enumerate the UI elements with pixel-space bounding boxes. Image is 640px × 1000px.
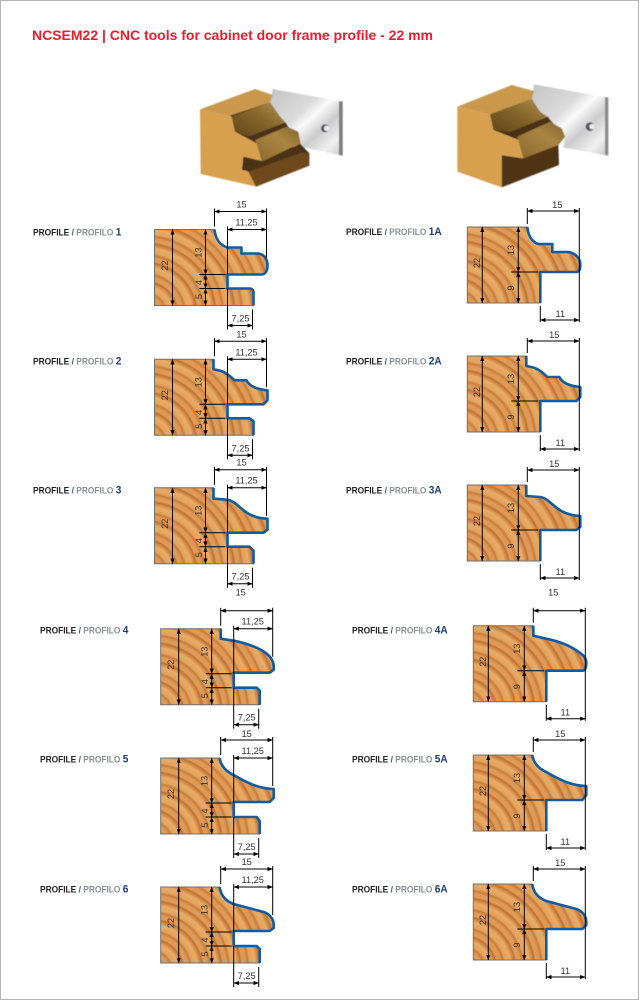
profile 2 diagram: [154, 329, 268, 459]
dimensions: [160, 329, 266, 459]
dimensions: 4: [200, 679, 210, 684]
dimensions: [160, 458, 266, 588]
dimensions: 11: [561, 837, 570, 847]
dimensions: 13: [194, 377, 204, 387]
wood front face: [457, 107, 523, 187]
dimensions: 13: [194, 247, 204, 258]
dimensions: 22: [160, 519, 170, 529]
dimensions: 11,25: [235, 347, 258, 357]
wood section: [154, 230, 268, 306]
dimensions: 9: [506, 414, 516, 420]
dimensions: 5: [194, 424, 204, 429]
cutter edge: [220, 887, 274, 963]
dimensions: 4: [194, 410, 204, 415]
dimensions: 22: [478, 915, 488, 925]
profile 4 diagram: [161, 588, 274, 729]
wood section: [161, 758, 274, 834]
dimensions: 9: [506, 285, 516, 291]
wood top face: [457, 85, 534, 114]
dimensions: 5: [194, 552, 204, 557]
cutter edge: [533, 626, 586, 702]
dimensions: [166, 729, 273, 858]
cutter edge: [532, 755, 586, 831]
profile 5A diagram: [473, 729, 586, 850]
dimensions: 13: [506, 374, 516, 384]
dimensions: 13: [512, 902, 522, 912]
dimensions: 11: [561, 708, 570, 718]
dimensions: 11,25: [242, 746, 264, 756]
dimensions: 13: [200, 905, 210, 915]
dimensions: 15: [236, 588, 246, 598]
profile 1A diagram: [467, 200, 580, 322]
dimensions: 4: [200, 937, 210, 943]
dimensions: 7,25: [238, 713, 256, 723]
cutter edge: [526, 485, 580, 561]
label: profile 3A: PROFILE / PROFILO 3A: [346, 484, 442, 497]
wood section: [473, 626, 586, 702]
dimensions: 7,25: [238, 971, 256, 981]
dimensions: 5: [200, 822, 210, 828]
dimensions: 22: [472, 258, 482, 268]
wood section: [467, 485, 580, 561]
dimensions: 22: [160, 390, 170, 400]
dimensions: 22: [166, 918, 176, 928]
profile 4A diagram: [473, 588, 586, 721]
wood section: [154, 488, 268, 564]
dimensions: 13: [194, 506, 204, 516]
dimensions: 15: [236, 329, 247, 339]
dimensions: [472, 200, 579, 322]
title: NCSEM22 | CNC tools for cabinet door frame profile - 22 mm: [32, 27, 433, 43]
dimensions: 15: [242, 857, 252, 867]
wood section: [161, 629, 274, 705]
cutter edge: [214, 230, 268, 306]
wood section: [473, 884, 586, 960]
label: profile 1: PROFILE / PROFILO 1: [33, 226, 121, 239]
label: profile 3: PROFILE / PROFILO 3: [33, 484, 121, 497]
cutter edge: [220, 758, 274, 834]
dimensions: 5: [200, 951, 210, 957]
wood cut faces: [490, 99, 565, 187]
dimensions: 7,25: [232, 314, 249, 324]
dimensions: 15: [236, 200, 247, 210]
dimensions: 15: [555, 729, 565, 739]
dimensions: [472, 330, 579, 451]
profile 6 diagram: [161, 857, 274, 987]
dimensions: 11: [556, 309, 565, 319]
profile 6A diagram: [473, 858, 586, 979]
dimensions: 15: [549, 459, 559, 469]
label: profile 4: PROFILE / PROFILO 4: [40, 624, 128, 637]
illustration: 3D wood frame with cutter, profile without groove: [457, 84, 608, 187]
dimensions: [472, 459, 579, 580]
dimensions: 22: [472, 387, 482, 397]
dimensions: 11,25: [242, 875, 264, 885]
dimensions: 22: [166, 660, 176, 670]
cutter edge: [527, 227, 580, 303]
label: profile 6A: PROFILE / PROFILO 6A: [352, 883, 448, 896]
profile 5 diagram: [161, 729, 274, 858]
wood front face: [200, 109, 262, 187]
dimensions: 13: [512, 773, 522, 783]
dimensions: 11,25: [235, 476, 258, 486]
cutter edge: [214, 359, 268, 435]
dimensions: 15: [552, 200, 562, 210]
dimensions: 5: [200, 693, 210, 698]
dimensions: 11: [556, 567, 565, 577]
profile 1 diagram: [154, 200, 268, 330]
dimensions: 22: [472, 516, 482, 526]
dimensions: 13: [506, 503, 516, 513]
dimensions: 13: [512, 644, 522, 654]
dimensions: [478, 729, 585, 850]
profile 2A diagram: [467, 330, 580, 451]
cutter edge: [532, 884, 586, 960]
steel knife plate: [270, 89, 343, 156]
label: profile 2A: PROFILE / PROFILO 2A: [346, 355, 442, 368]
cutter edge: [221, 629, 274, 705]
dimensions: [166, 857, 273, 987]
label: profile 5A: PROFILE / PROFILO 5A: [352, 753, 448, 766]
dimensions: 13: [506, 245, 516, 255]
cutter edge: [214, 488, 268, 564]
dimensions: 9: [512, 684, 522, 689]
steel knife plate: [532, 84, 608, 156]
dimensions: 15: [548, 588, 558, 598]
dimensions: 15: [242, 729, 252, 739]
label: profile 5: PROFILE / PROFILO 5: [40, 753, 128, 766]
dimensions: [478, 858, 585, 979]
dimensions: 7,25: [238, 842, 256, 852]
illustration: 3D wood frame with cutter, profile with groove: [200, 89, 343, 187]
wood section: [161, 887, 274, 963]
wood section: [467, 356, 580, 432]
dimensions: 11,25: [235, 218, 258, 228]
label: profile 2: PROFILE / PROFILO 2: [33, 355, 121, 368]
dimensions: 13: [200, 776, 210, 786]
dimensions: 7,25: [232, 572, 249, 582]
dimensions: 22: [478, 657, 488, 667]
label: profile 1A: PROFILE / PROFILO 1A: [346, 226, 442, 238]
dimensions: 7,25: [232, 443, 249, 453]
dimensions: 22: [160, 260, 170, 271]
dimensions: 9: [506, 543, 516, 549]
dimensions: 9: [512, 942, 522, 948]
dimensions: 11: [556, 438, 565, 448]
dimensions: 15: [549, 330, 559, 340]
dimensions: 11: [561, 966, 570, 976]
dimensions: 9: [512, 813, 522, 819]
dimensions: [478, 588, 585, 721]
dimensions: 22: [478, 786, 488, 796]
dimensions: 15: [236, 458, 247, 468]
dimensions: 5: [194, 294, 204, 299]
label: profile 6: PROFILE / PROFILO 6: [40, 883, 128, 896]
wood top face: [200, 89, 273, 117]
dimensions: 4: [194, 280, 204, 285]
dimensions: 13: [200, 647, 210, 657]
profile 3 diagram: [154, 458, 268, 588]
wood section: [154, 359, 268, 435]
dimensions: 15: [555, 858, 565, 868]
profile 3A diagram: [467, 459, 580, 580]
dimensions: 11,25: [242, 617, 264, 627]
wood cut faces: [230, 102, 309, 187]
dimensions: 22: [166, 789, 176, 799]
dimensions: 4: [200, 808, 210, 814]
cutter edge: [526, 356, 580, 432]
dimensions: [160, 200, 266, 330]
label: profile 4A: PROFILE / PROFILO 4A: [352, 624, 448, 637]
wood section: [467, 227, 580, 303]
wood section: [473, 755, 586, 831]
dimensions: 4: [194, 538, 204, 543]
dimensions: [166, 588, 273, 729]
